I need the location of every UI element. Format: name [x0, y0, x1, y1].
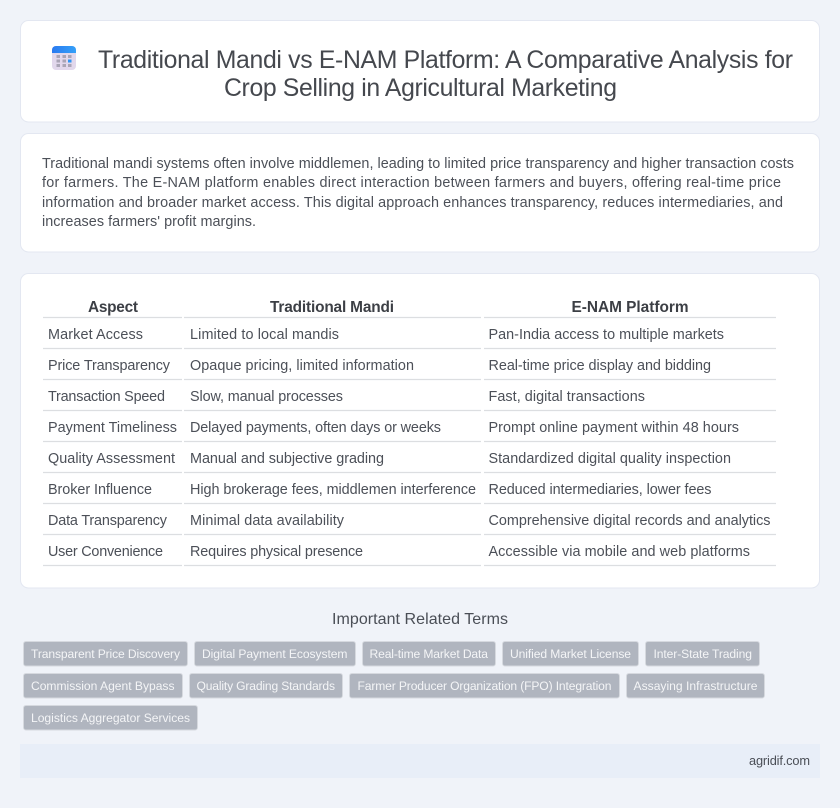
tag: Inter-State Trading [654, 647, 752, 661]
tag: Logistics Aggregator Services [31, 711, 190, 725]
table row: data transparency [48, 513, 770, 529]
icon: calendar [52, 46, 76, 70]
table row: broker influence: High brokerage fees, middlemen interference [190, 482, 476, 498]
table row: broker influence [48, 482, 712, 498]
tag [646, 642, 760, 666]
table row: data transparency: Minimal data availability [190, 513, 345, 529]
panel: comparison table [20, 274, 820, 588]
table row: payment timeliness: Delayed payments, often days or weeks [190, 420, 441, 436]
tag: Quality Grading Standards [196, 679, 335, 693]
title: Crop Selling in Agricultural Marketing [224, 75, 617, 102]
tag [190, 674, 342, 698]
table header: Aspect [88, 299, 138, 316]
text block: summary: for farmers. The E-NAM platform enables direct interaction between farmers and buyers, offering real-time price [42, 175, 781, 191]
tag [350, 674, 620, 698]
table row: market access: Limited to local mandis [190, 327, 339, 343]
table row: payment timeliness: Prompt online payment within 48 hours [488, 420, 739, 436]
table row: price transparency: Price Transparency [48, 358, 171, 374]
tag: Farmer Producer Organization (FPO) Integration [358, 679, 612, 693]
tag [194, 642, 356, 666]
table row: broker influence: Reduced intermediaries, lower fees [488, 482, 712, 498]
table row: transaction speed: Transaction Speed [48, 389, 165, 405]
heading: important related terms: Important Related Terms [332, 611, 508, 628]
table header: E-NAM Platform [572, 299, 688, 316]
table row: transaction speed [48, 389, 645, 405]
table row: broker influence: Broker Influence [48, 482, 152, 498]
table row: quality assessment: Standardized digital quality inspection [488, 451, 731, 467]
title: Traditional Mandi vs E-NAM Platform: A Comparative Analysis for [98, 47, 793, 74]
tag: Real-time Market Data [370, 647, 488, 661]
table row: market access: Pan-India access to multiple markets [488, 327, 724, 343]
table row: market access [48, 327, 724, 343]
table row: price transparency: Opaque pricing, limited information [190, 358, 414, 374]
tag: Assaying Infrastructure [634, 679, 758, 693]
panel: title header [20, 20, 820, 122]
table header [88, 299, 688, 316]
table row: data transparency: Comprehensive digital records and analytics [488, 513, 770, 529]
table row: transaction speed: Fast, digital transactions [488, 389, 645, 405]
table row: payment timeliness [48, 420, 739, 436]
table row: user convenience: Accessible via mobile and web platforms [488, 544, 750, 560]
table header: Traditional Mandi [270, 299, 394, 316]
text block: summary: Traditional mandi systems often involve middlemen, leading to limited price transparency and higher transaction costs [42, 156, 794, 172]
tag [362, 642, 496, 666]
tag [24, 706, 198, 730]
table row: quality assessment: Quality Assessment [48, 451, 175, 467]
table row: quality assessment: Manual and subjective grading [190, 451, 384, 467]
tag: Commission Agent Bypass [31, 679, 174, 693]
table row: quality assessment [48, 451, 731, 467]
tag group: related terms [24, 642, 764, 730]
table row: market access: Market Access [48, 327, 143, 343]
tag [24, 674, 182, 698]
table row: price transparency [48, 358, 711, 374]
footer bar [20, 744, 820, 778]
table row: user convenience [48, 544, 750, 560]
table row: payment timeliness: Payment Timeliness [48, 420, 177, 436]
tag [24, 642, 188, 666]
tag [626, 674, 764, 698]
table row: data transparency: Data Transparency [48, 513, 168, 529]
table row: transaction speed: Slow, manual processes [190, 389, 343, 405]
text block: summary [42, 156, 794, 230]
text block: summary: increases farmers' profit margins. [42, 214, 256, 230]
tag: Digital Payment Ecosystem [202, 647, 348, 661]
tag: Unified Market License [510, 647, 631, 661]
table row: price transparency: Real-time price display and bidding [488, 358, 711, 374]
table row: user convenience: Requires physical presence [190, 544, 363, 560]
footer source: agridif.com [749, 753, 810, 768]
text block: summary: information and broader market access. This digital approach enhances transparency, reduces intermediaries, and [42, 195, 783, 211]
title [98, 47, 793, 102]
panel: summary paragraph [20, 134, 820, 252]
tag: Transparent Price Discovery [31, 647, 181, 661]
table row: user convenience: User Convenience [48, 544, 163, 560]
tag [502, 642, 638, 666]
